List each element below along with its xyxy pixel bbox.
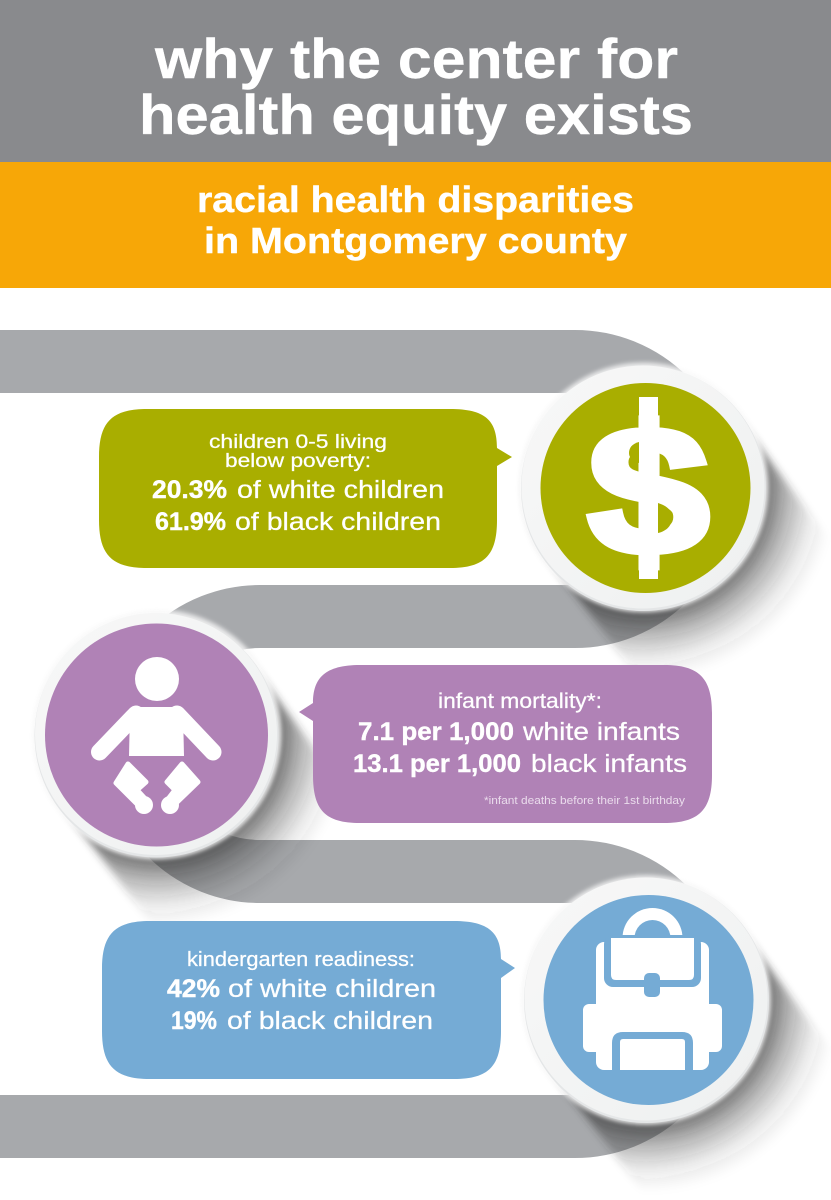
header band: title <box>0 0 831 162</box>
poverty heading: children 0-5 living <box>209 432 387 453</box>
poverty heading: below poverty: <box>225 451 371 472</box>
poverty heading <box>209 432 387 472</box>
title <box>139 27 693 146</box>
kindergarten heading: kindergarten readiness: <box>187 949 415 971</box>
subtitle: racial health disparities <box>197 179 634 220</box>
panel: infant mortality callout <box>299 665 712 823</box>
kindergarten statistics <box>167 975 436 1035</box>
subtitle: in Montgomery county <box>204 220 627 261</box>
poverty statistics: 61.9% <box>155 508 226 536</box>
kindergarten statistics: of white children <box>228 975 436 1003</box>
mortality statistics: black infants <box>531 750 687 778</box>
mortality statistics: 13.1 per 1,000 <box>353 750 521 778</box>
title: why the center for <box>154 27 678 90</box>
mortality heading: infant mortality*: <box>438 690 602 713</box>
mortality statistics <box>353 718 687 778</box>
panel: kindergarten readiness callout <box>102 921 515 1079</box>
subtitle band <box>0 162 831 288</box>
kindergarten statistics: 42% <box>167 975 220 1003</box>
poverty statistics: 20.3% <box>152 476 227 504</box>
poverty statistics: of white children <box>237 476 444 504</box>
footnote: *infant deaths before their 1st birthday <box>484 795 686 807</box>
icon: dollar coin <box>518 362 768 612</box>
title: health equity exists <box>139 83 693 146</box>
mortality statistics: 7.1 per 1,000 <box>358 718 514 746</box>
subtitle <box>197 179 634 261</box>
kindergarten statistics: 19% <box>171 1007 217 1035</box>
icon: baby <box>100 657 213 814</box>
long shadows behind the circles <box>157 488 766 1160</box>
poverty statistics: of black children <box>235 508 441 536</box>
serpentine path band <box>0 362 703 1126</box>
poverty statistics <box>152 476 444 536</box>
panel: child poverty callout <box>99 409 512 568</box>
icon: backpack <box>583 908 722 1070</box>
icon: dollar sign: $ <box>588 391 709 592</box>
icon: backpack coin <box>521 875 771 1125</box>
mortality statistics: white infants <box>522 718 680 746</box>
kindergarten statistics: of black children <box>227 1007 433 1035</box>
icon: baby coin <box>32 610 282 860</box>
